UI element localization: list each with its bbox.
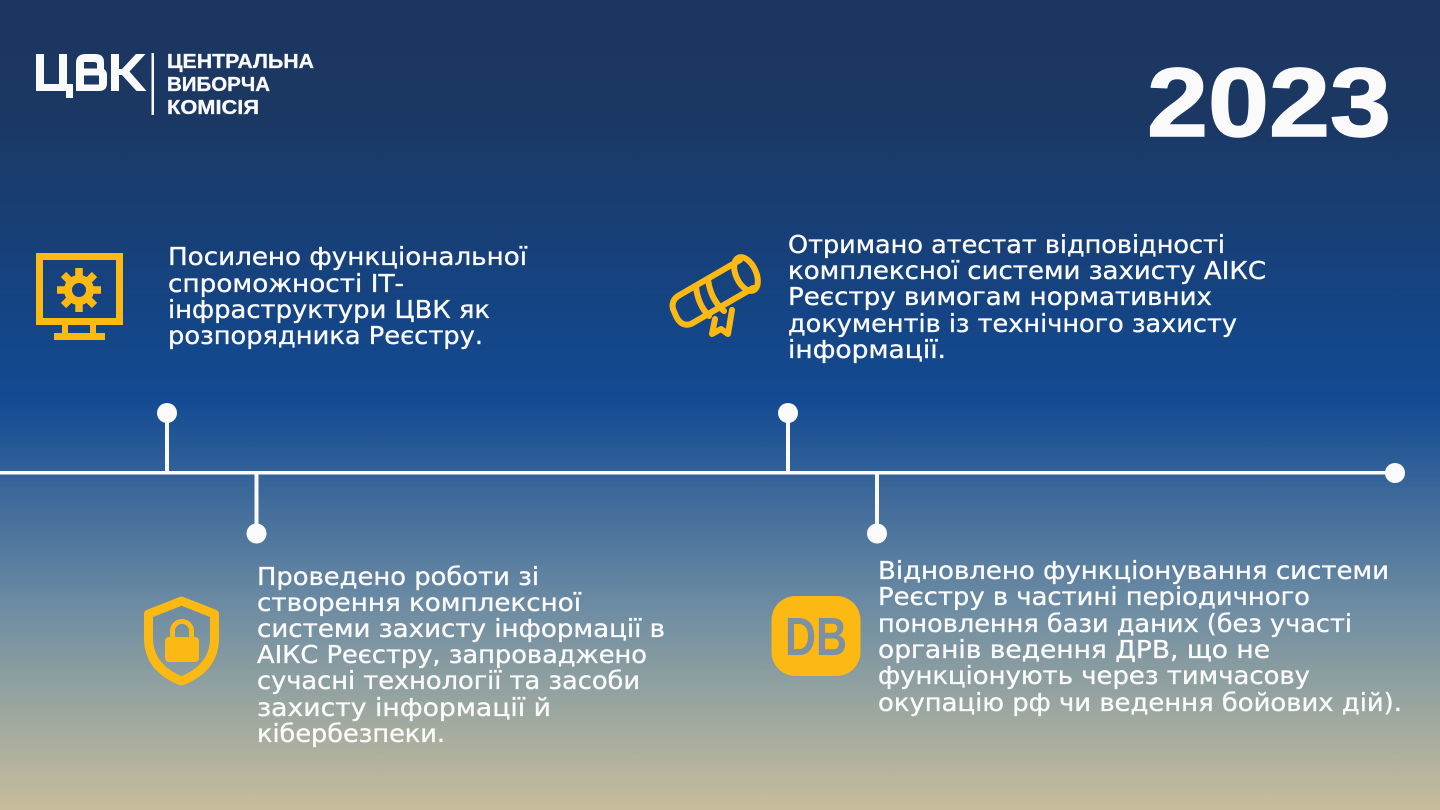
icon: monitor with gear bbox=[40, 256, 120, 340]
text: attestation: комплексної системи захисту АІКС bbox=[788, 256, 1266, 285]
text: IT infrastructure bbox=[168, 242, 527, 350]
text: attestation bbox=[788, 230, 1266, 364]
icon: diploma scroll bbox=[673, 253, 763, 334]
text: information protection: створення комплексної bbox=[257, 588, 581, 617]
text: IT infrastructure: Посилено функціональної bbox=[168, 242, 527, 271]
logo caption: ЦЕНТРАЛЬНА bbox=[167, 51, 314, 73]
text: information protection: кібербезпеки. bbox=[257, 719, 445, 748]
text: register restoration bbox=[878, 556, 1402, 717]
timeline bbox=[0, 403, 1405, 544]
icon: DB badge: DB bbox=[785, 607, 847, 667]
text: register restoration: функціонують через тимчасову bbox=[878, 661, 1310, 690]
text: information protection: сучасні технології та засоби bbox=[257, 666, 640, 695]
text: information protection: системи захисту інформації в bbox=[257, 614, 665, 643]
text: information protection bbox=[257, 562, 665, 748]
text: attestation: Реєстру вимогам нормативних bbox=[788, 282, 1212, 311]
text: IT infrastructure: інфраструктури ЦВК як bbox=[168, 295, 490, 324]
text: information protection: АІКС Реєстру, запроваджено bbox=[257, 640, 647, 669]
text: IT infrastructure: розпорядника Реєстру. bbox=[168, 321, 483, 350]
icon: shield with padlock bbox=[148, 601, 214, 681]
logo: ЦВК bbox=[36, 51, 314, 119]
logo caption bbox=[167, 51, 314, 119]
text: IT infrastructure: спроможності ІТ- bbox=[168, 269, 404, 298]
text: register restoration: органів ведення ДРВ, що не bbox=[878, 635, 1270, 664]
logo wordmark bbox=[36, 53, 154, 115]
year heading: 2023 bbox=[1147, 48, 1391, 157]
text: register restoration: Відновлено функціонування системи bbox=[878, 556, 1389, 585]
text: register restoration: Реєстру в частині періодичного bbox=[878, 582, 1310, 611]
text: attestation: документів із технічного захисту bbox=[788, 309, 1237, 338]
text: register restoration: окупацію рф чи ведення бойових дій). bbox=[878, 688, 1402, 717]
text: attestation: інформації. bbox=[788, 335, 946, 364]
logo caption: КОМІСІЯ bbox=[167, 97, 259, 119]
text: register restoration: поновлення бази даних (без участі bbox=[878, 609, 1352, 638]
logo caption: ВИБОРЧА bbox=[167, 74, 270, 96]
text: information protection: Проведено роботи зі bbox=[257, 562, 539, 591]
text: attestation: Отримано атестат відповідності bbox=[788, 230, 1225, 259]
text: information protection: захисту інформації й bbox=[257, 693, 551, 722]
icon: DB badge bbox=[772, 596, 860, 676]
